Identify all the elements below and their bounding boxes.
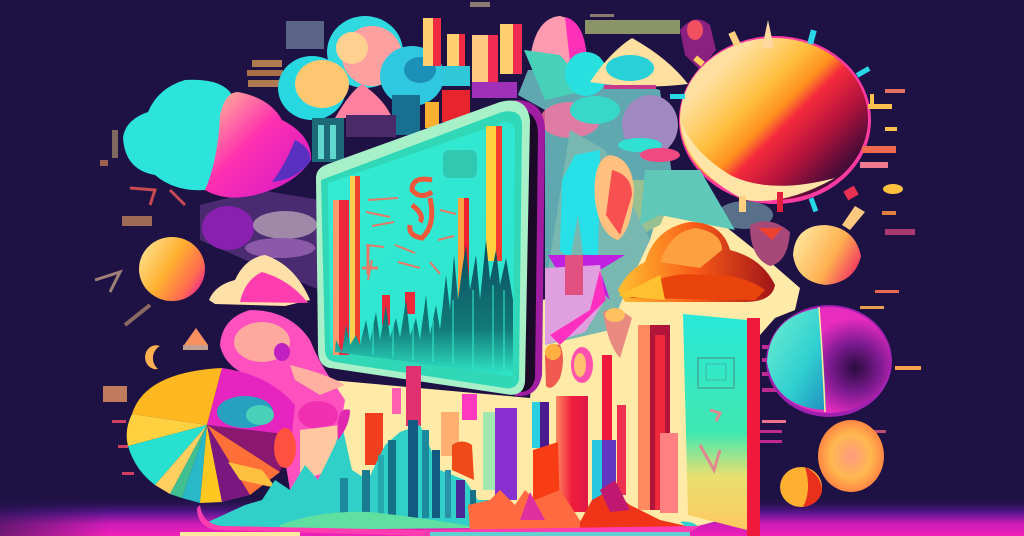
hatch marks right of panel (760, 345, 786, 443)
orange cloud (618, 221, 790, 302)
top scribbles (247, 2, 680, 87)
pie chart (127, 368, 296, 503)
top center egg and collage (518, 16, 773, 300)
screen glyph (410, 179, 432, 238)
main screen (316, 100, 545, 396)
screen chart spikes (335, 240, 513, 376)
screen scribbles (362, 198, 456, 280)
base platform (180, 505, 700, 536)
confetti right (842, 89, 921, 433)
center teal streaks and ice cream (545, 130, 735, 345)
small eggs (545, 308, 632, 388)
teal mountains (208, 409, 698, 530)
city bars (365, 325, 678, 513)
left pink clouds (220, 310, 345, 490)
screen stripes (372, 285, 505, 372)
screen outline icon (443, 150, 477, 178)
top cloud cluster (278, 16, 444, 162)
purple swirl (202, 206, 317, 258)
mountain spires (340, 420, 476, 518)
confetti left (95, 130, 208, 475)
floor left fade (0, 497, 110, 536)
floor glow (0, 497, 1024, 536)
left pale cloud (209, 255, 310, 306)
teal and pink cloud (123, 80, 311, 198)
dark purple back of screen region left (200, 190, 320, 290)
central cream backdrop (330, 215, 800, 528)
right spheres (766, 225, 892, 507)
top bars (423, 18, 522, 128)
left sphere (139, 237, 205, 301)
screen tall bars (333, 200, 339, 355)
right panel (683, 314, 760, 536)
large sun sphere (670, 20, 871, 212)
